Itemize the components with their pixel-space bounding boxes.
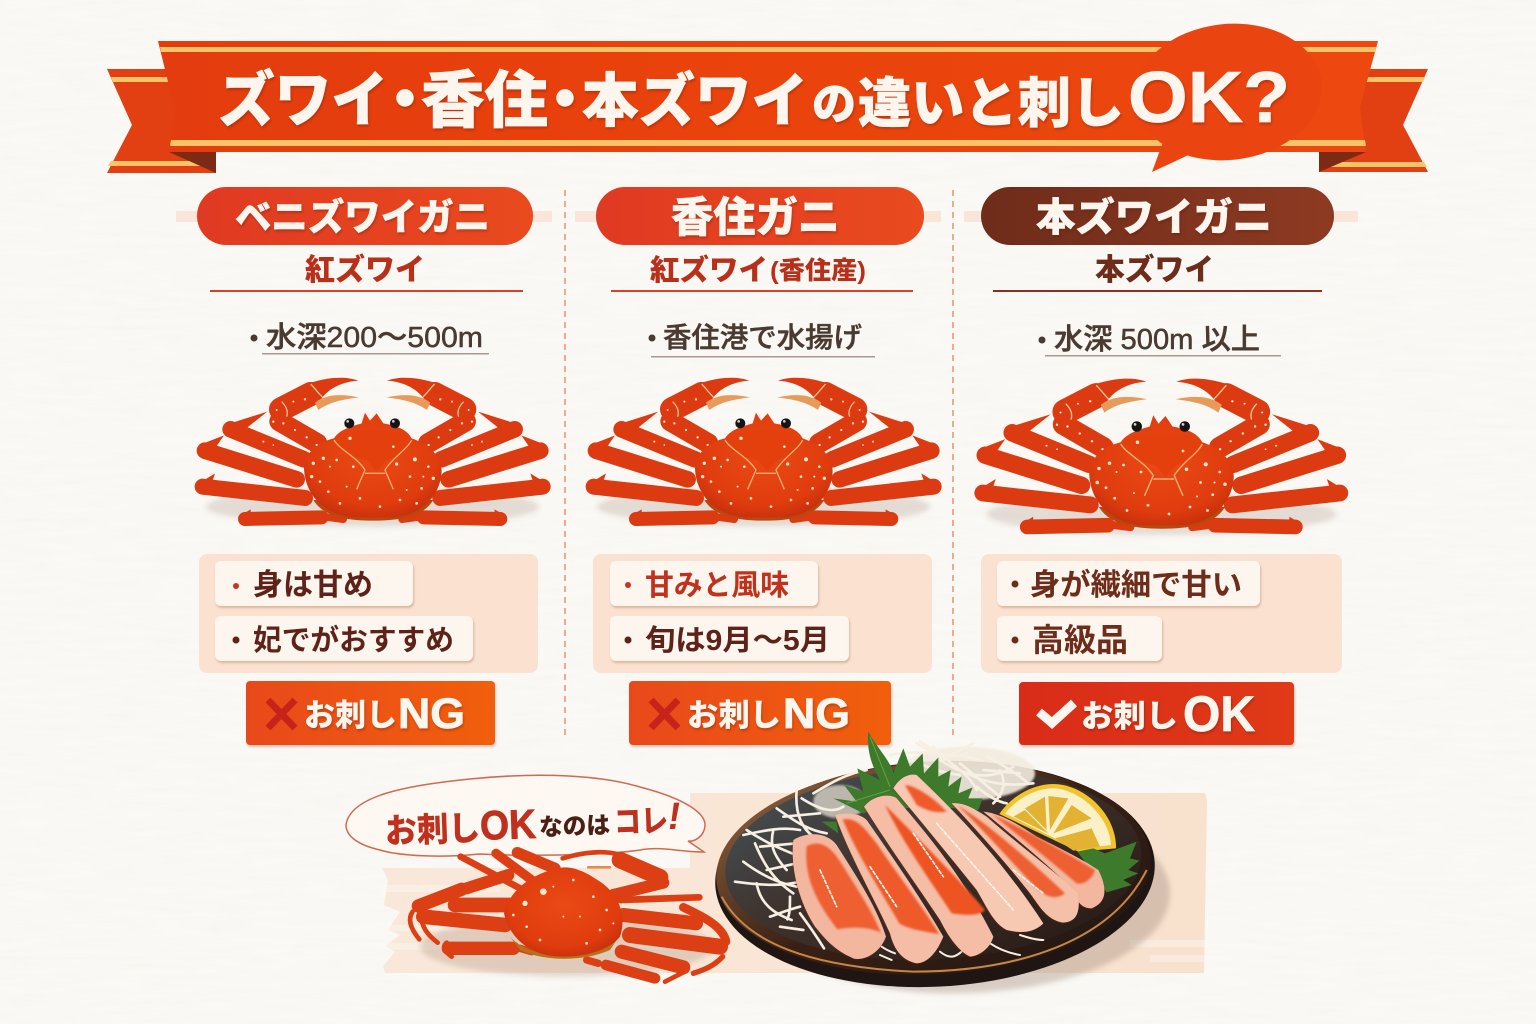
feature chip: 妃でがおすすめ: 妃でがおすすめ <box>253 623 454 657</box>
header pill <box>176 187 552 245</box>
callout: お刺しOKなのはコレ!: ! <box>667 796 681 838</box>
callout: お刺しOKなのはコレ!: OK <box>479 801 537 849</box>
feature chip: 身は甘め: 身は甘め <box>253 569 373 602</box>
species name: 紅ズワイ <box>650 253 768 287</box>
title text: ・ <box>535 67 595 134</box>
feature chip: 身が繊細で甘い: 身が繊細で甘い <box>1030 568 1242 602</box>
callout: お刺しOKなのはコレ!: お刺し <box>384 810 481 851</box>
callout: お刺しOKなのはコレ! <box>346 775 705 856</box>
icon: whole cooked crab <box>410 852 726 982</box>
title text: ・ <box>375 67 435 134</box>
callout: お刺しOKなのはコレ!: なのは <box>539 812 611 842</box>
feature list <box>199 554 538 673</box>
shredded radish <box>735 742 1043 960</box>
speech bubble <box>1127 15 1329 172</box>
NG button: NG <box>783 690 850 738</box>
icon: red snow crab <box>195 378 551 527</box>
panel: ベニズワイガニ <box>176 187 552 745</box>
feature chip: 旬は9月〜5月: 旬は9月〜5月 <box>645 624 830 657</box>
species name: (香住産) <box>770 257 866 285</box>
header pill: 本ズワイガニ <box>1036 196 1272 240</box>
NG button <box>629 681 891 745</box>
header pill <box>575 187 941 245</box>
title text: ズワイ <box>218 67 388 134</box>
ribbon left tail <box>107 69 216 173</box>
feature chip: 身が繊細で甘い <box>997 561 1260 606</box>
NG button: お刺し <box>304 698 397 733</box>
species name: 紅ズワイ <box>305 253 425 287</box>
species name: 本ズワイ <box>1095 253 1214 287</box>
feature chip: 高級品 <box>997 616 1162 661</box>
plate shadow <box>737 793 1170 993</box>
OK button <box>1019 682 1294 745</box>
feature chip: 妃でがおすすめ <box>215 616 473 661</box>
NG button <box>246 681 495 745</box>
feature chip: 高級品: 高級品 <box>1032 622 1128 658</box>
OK button: お刺し <box>1081 699 1178 734</box>
feature chip: 甘みと風味 <box>610 561 818 606</box>
panel: 本ズワイガニ <box>964 187 1358 745</box>
NG button: NG <box>398 690 465 738</box>
icon: snow crab <box>974 379 1348 535</box>
title text: 違いと刺し <box>858 74 1124 134</box>
header pill <box>964 187 1358 245</box>
title text <box>218 58 1290 138</box>
title text: 香住 <box>421 67 548 136</box>
ribbon right tail <box>1319 69 1428 172</box>
plate <box>709 750 1161 998</box>
OK button: OK <box>1183 686 1255 742</box>
callout: お刺しOKなのはコレ!: コレ <box>613 803 669 840</box>
crab leg meat sticks <box>793 775 1104 963</box>
feature chip: 旬は9月〜5月 <box>610 616 849 661</box>
icon: Kasumi crab <box>586 378 942 527</box>
NG button: お刺し <box>687 698 781 733</box>
shiso leaf back <box>822 732 983 833</box>
column dividers <box>565 190 953 738</box>
title text: の <box>812 80 856 129</box>
lemon slice <box>999 784 1116 852</box>
title text: OK? <box>1128 58 1290 138</box>
panel: 香住ガニ <box>575 187 942 745</box>
shiso leaf right <box>1077 842 1139 892</box>
feature list <box>981 554 1342 673</box>
feature chip: 身は甘め <box>215 561 413 606</box>
title ribbon banner <box>107 15 1428 173</box>
title text: 本ズワイ <box>582 69 808 134</box>
icon: crab sashimi plate <box>709 732 1170 998</box>
header pill: ベニズワイガニ <box>235 196 490 238</box>
feature list <box>593 554 932 673</box>
habitat note: 水深200〜500m <box>266 321 483 354</box>
habitat note: 水深 500m 以上 <box>1054 323 1260 356</box>
habitat note: 香住港で水揚げ <box>663 322 862 353</box>
peach brush band <box>380 793 1210 973</box>
header pill: 香住ガニ <box>671 194 840 241</box>
feature chip: 甘みと風味: 甘みと風味 <box>645 569 789 602</box>
ribbon main band <box>158 41 1378 152</box>
species name <box>611 253 913 292</box>
